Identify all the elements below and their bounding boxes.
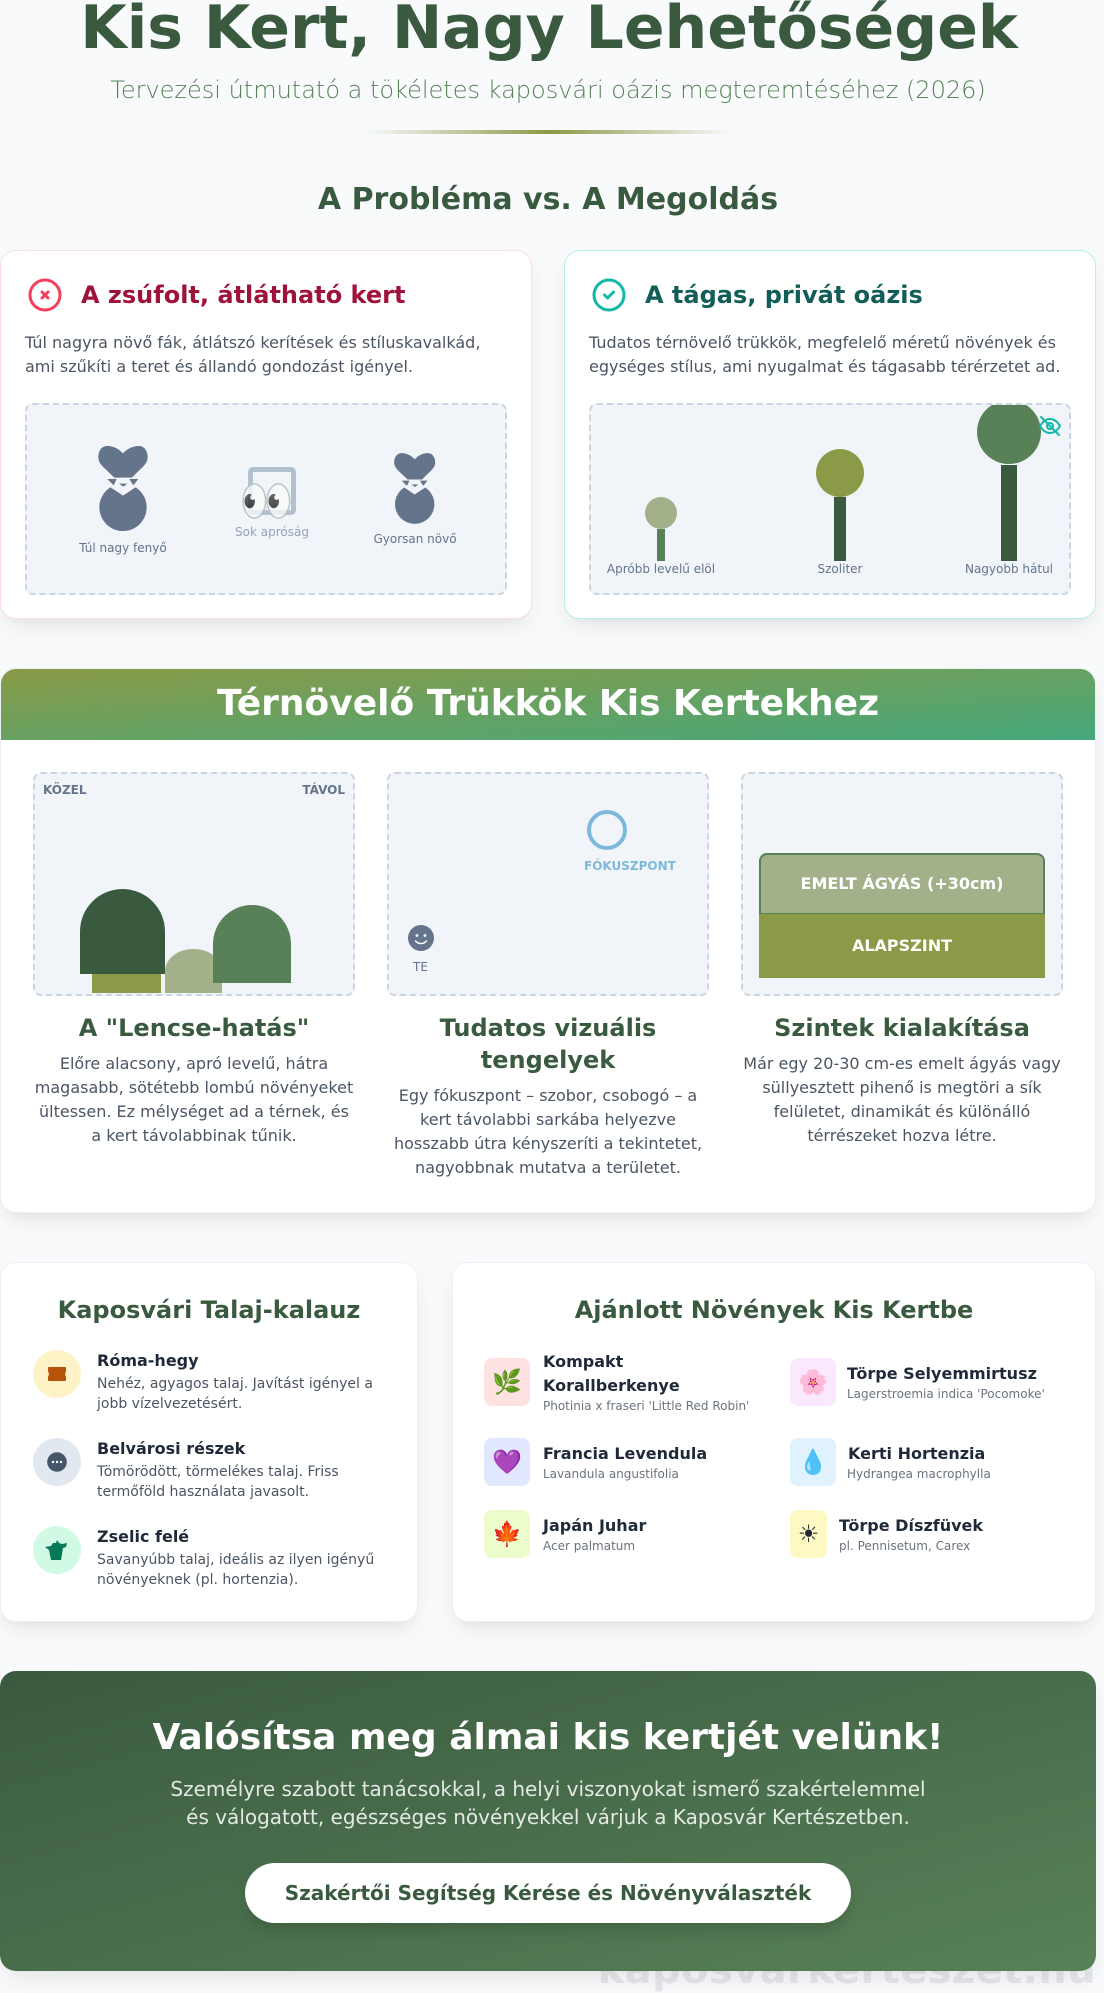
soil: Zselic text — [97, 1552, 374, 1588]
diagram: lens effect — [33, 772, 355, 996]
tree: specimen — [816, 449, 864, 561]
trick 2 text — [394, 1086, 702, 1177]
icon: check in circle — [592, 278, 626, 312]
tricks banner: Térnövelő Trükkök Kis Kertekhez — [217, 683, 879, 724]
CTA heading: Valósítsa meg álmai kis kertjét velünk! — [153, 1717, 943, 1758]
tricks banner — [0, 668, 1096, 740]
label: far: TÁVOL — [302, 783, 345, 797]
plant: light arch — [165, 949, 222, 993]
soil: Róma-hegy text — [96, 1376, 373, 1412]
solution text — [588, 332, 1060, 376]
label: specimen: Szoliter — [818, 562, 862, 576]
icon: droplet: 💧 — [798, 1448, 828, 1476]
plant: Törpe Selyemmirtusz: Törpe Selyemmirtusz — [847, 1364, 1037, 1382]
watermark: site name: kaposvarkerteszet.hu — [598, 1947, 1096, 1993]
diagram: levels — [741, 772, 1063, 996]
panel: space-expanding tricks — [0, 668, 1096, 1213]
trick 2 text: Egy fókuszpont – szobor, csobogó – a — [399, 1086, 697, 1105]
icon: fast-growing plant — [394, 453, 436, 524]
label: small leaved at front: Apróbb levelű elöl — [607, 562, 715, 576]
diagram: visual axis — [387, 772, 709, 996]
latin: Photinia: Photinia x fraseri 'Little Red Robin' — [543, 1399, 749, 1413]
plant: Kompakt Korallberkenye: Kompakt — [543, 1352, 623, 1370]
tree: large at back — [977, 400, 1041, 464]
tree: small front — [645, 497, 677, 561]
icon: purple heart — [484, 1438, 530, 1486]
label: focal point: FÓKUSZPONT — [584, 859, 676, 873]
icon: sun: ☀ — [798, 1520, 819, 1548]
soil: Belvárosi text: Tömörödött, törmelékes talaj. Friss — [97, 1464, 339, 1480]
icon: blossom: 🌸 — [798, 1368, 828, 1396]
label: many small things: Sok apróság — [235, 524, 309, 538]
trick 2 text: hosszabb útra kényszeríti a tekintetet, — [394, 1134, 702, 1153]
label: near: KÖZEL — [43, 783, 87, 797]
label: fast growing: Gyorsan növő — [373, 532, 457, 546]
latin: Lagerstroemia: Lagerstroemia indica 'Pocomoke' — [847, 1387, 1045, 1401]
trick 1 text: magasabb, sötétebb lombú növényeket — [35, 1078, 353, 1097]
panel: call to action — [0, 1671, 1096, 1971]
trick 3 text — [743, 1054, 1061, 1145]
soil: Róma-hegy text: Nehéz, agyagos talaj. Javítást igényel a — [97, 1376, 373, 1392]
raised bed — [759, 853, 1045, 915]
trick 1 text: ültessen. Ez mélységet ad a térnek, és — [39, 1102, 349, 1121]
trick 2 heading: tengelyek — [481, 1046, 615, 1074]
soil: Róma-hegy text: jobb vízelvezetésért. — [97, 1396, 242, 1412]
icon: focal ring — [587, 810, 627, 850]
trick 2 text: kert távolabbi sarkába helyezve — [420, 1110, 676, 1129]
icon: x in circle — [28, 278, 62, 312]
icon: clay soil — [33, 1350, 81, 1398]
soil guide heading: Kaposvári Talaj-kalauz — [58, 1296, 360, 1324]
soil: Belvárosi text — [96, 1464, 339, 1500]
problem text — [24, 332, 480, 376]
icon: blossom — [790, 1358, 836, 1406]
latin: Acer: Acer palmatum — [543, 1539, 635, 1553]
header divider — [366, 130, 732, 134]
icon: rubble soil — [33, 1438, 81, 1486]
plant: Kerti Hortenzia: Kerti Hortenzia — [848, 1444, 985, 1462]
CTA button — [245, 1863, 851, 1923]
trick 1 text: a kert távolabbinak tűnik. — [91, 1126, 297, 1145]
latin: Pennisetum: pl. Pennisetum, Carex — [839, 1539, 970, 1553]
trick 1: lens effect — [33, 772, 355, 1145]
soil: Zselic text: növényeknek (pl. hortenzia). — [97, 1572, 298, 1588]
plant: Kompakt Korallberkenye: Korallberkenye — [543, 1376, 680, 1394]
problem heading: A zsúfolt, átlátható kert — [81, 281, 405, 309]
icon: fence and eyes: 👀 — [239, 475, 294, 527]
plant: dark arch — [80, 889, 165, 974]
plant: Francia Levendula: Francia Levendula — [543, 1444, 707, 1462]
CTA text: és válogatott, egészséges növényekkel várjuk a Kaposvár Kertészetben. — [186, 1805, 910, 1829]
icon: maple leaf: 🍁 — [492, 1520, 522, 1548]
icon: sun — [790, 1510, 827, 1558]
panel: recommended plants — [452, 1262, 1096, 1630]
CTA text: Személyre szabott tanácsokkal, a helyi viszonyokat ismerő szakértelemmel — [170, 1777, 926, 1801]
soil: Róma-hegy title: Róma-hegy — [97, 1351, 199, 1370]
panel: problem — [0, 250, 532, 628]
plant: Kompakt Korallberkenye — [543, 1352, 680, 1394]
trick 3: levels — [741, 772, 1063, 1145]
CTA button: Szakértői Segítség Kérése és Növényválaszték — [285, 1881, 811, 1905]
eye-off icon — [1039, 416, 1061, 436]
base level — [759, 914, 1045, 978]
icon: viewer smiley — [408, 925, 434, 951]
solution heading: A tágas, privát oázis — [645, 281, 923, 309]
trick 3 text: térrészeket hozva létre. — [807, 1126, 997, 1145]
plants heading: Ajánlott Növények Kis Kertbe — [575, 1296, 973, 1324]
problem text: Túl nagyra növő fák, átlátszó kerítések és stíluskavalkád, — [25, 332, 480, 352]
soil: Zselic text: Savanyúbb talaj, ideális az ilyen igényű — [97, 1552, 374, 1568]
icon: droplet — [790, 1438, 836, 1486]
label: too big conifer: Túl nagy fenyő — [79, 540, 167, 554]
section heading: problem vs solution: A Probléma vs. A Megoldás — [318, 182, 778, 217]
icon: acidic soil — [33, 1526, 81, 1574]
trick 1 heading: A "Lencse-hatás" — [79, 1014, 309, 1042]
trick 3 heading: Szintek kialakítása — [774, 1014, 1030, 1042]
trick 3 text: felületet, dinamikát és különálló — [774, 1102, 1030, 1121]
icon: herb — [484, 1358, 530, 1406]
raised bed: EMELT ÁGYÁS (+30cm) — [801, 874, 1003, 893]
icon: oversized conifer — [98, 446, 148, 531]
label: larger at back: Nagyobb hátul — [965, 562, 1053, 576]
subtitle: Tervezési útmutató a tökéletes kaposvári oázis megteremtéséhez (2026) — [110, 76, 986, 104]
tree trunk: large at back — [1001, 465, 1017, 561]
trick 1 text: Előre alacsony, apró levelű, hátra — [60, 1054, 328, 1073]
label: you: TE — [413, 960, 428, 974]
trick 3 text: süllyesztett pihenő is megtöri a sík — [762, 1078, 1042, 1097]
plant: Japán Juhar: Japán Juhar — [543, 1516, 646, 1534]
base level: ALAPSZINT — [852, 936, 952, 955]
plant: olive base — [92, 974, 161, 993]
solution text: Tudatos térnövelő trükkök, megfelelő méretű növények és — [589, 332, 1056, 352]
trick 3 text: Már egy 20-30 cm-es emelt ágyás vagy — [743, 1054, 1061, 1073]
soil: Belvárosi title: Belvárosi részek — [97, 1439, 245, 1458]
CTA text — [170, 1777, 926, 1829]
icon: purple heart: 💜 — [492, 1448, 522, 1476]
solution text: egységes stílus, ami nyugalmat és tágasabb térérzetet ad. — [589, 357, 1060, 376]
latin: Hydrangea: Hydrangea macrophylla — [847, 1467, 991, 1481]
trick 1 text — [35, 1054, 353, 1145]
problem text: ami szűkíti a teret és állandó gondozást igényel. — [25, 357, 413, 376]
soil: Zselic title: Zselic felé — [97, 1527, 189, 1546]
plant: Törpe Díszfüvek: Törpe Díszfüvek — [839, 1516, 983, 1534]
soil: Belvárosi text: termőföld használata javasolt. — [97, 1484, 309, 1500]
trick 2: visual axes — [387, 772, 709, 1177]
panel: solution — [564, 250, 1096, 628]
diagram: spacious garden — [589, 403, 1071, 595]
trick 2 heading — [440, 1014, 656, 1074]
trick 2 text: nagyobbnak mutatva a területet. — [415, 1158, 681, 1177]
plant: mid arch — [213, 905, 291, 983]
icon: herb: 🌿 — [492, 1368, 522, 1396]
panel: soil guide — [0, 1262, 418, 1630]
trick 2 heading: Tudatos vizuális — [440, 1014, 656, 1042]
diagram: crowded garden — [25, 403, 507, 595]
latin: Lavandula: Lavandula angustifolia — [543, 1467, 679, 1481]
icon: maple leaf — [484, 1510, 530, 1558]
